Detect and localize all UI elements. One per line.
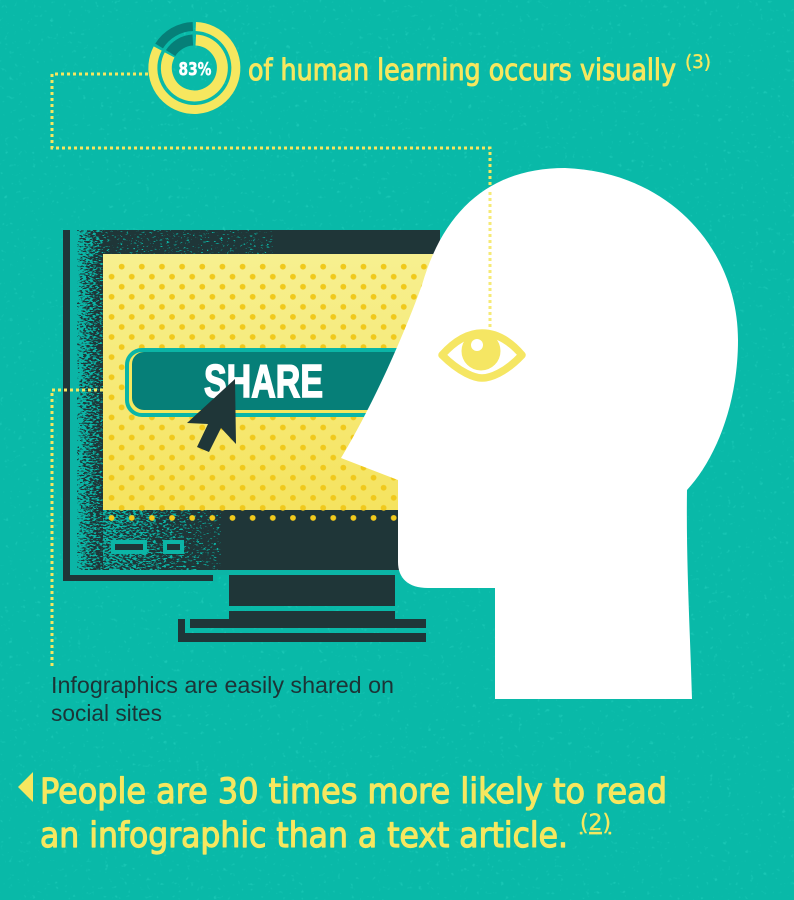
callout: 30 times more likely: [40, 772, 667, 856]
callout: 30 times more likely: an infographic than a text article.: [40, 816, 568, 856]
icon: left arrow: [18, 772, 33, 802]
reference 2: (2): [580, 811, 611, 836]
monitor buttons: [113, 542, 182, 552]
heading: visual learning: of human learning occurs visually: [248, 53, 676, 87]
icon: eye: [442, 332, 522, 378]
connector: screen to caption: [52, 390, 103, 668]
share button: [127, 350, 422, 415]
donut value: 83%: [178, 59, 212, 80]
frame grain: [75, 230, 273, 570]
share label: SHARE: [204, 355, 323, 407]
caption: sharing: social sites: [51, 700, 162, 726]
caption: sharing: Infographics are easily shared on: [51, 672, 394, 698]
connector: donut to eye: [52, 74, 490, 330]
monitor stand: [178, 575, 426, 642]
head silhouette: [341, 168, 738, 699]
donut chart: 83%: [153, 26, 236, 109]
icon: cursor arrow: [187, 379, 236, 452]
monitor: [63, 230, 442, 642]
halftone dots: [108, 262, 432, 522]
screen: [103, 254, 433, 510]
monitor frame: [63, 230, 440, 581]
reference 3: (3): [685, 51, 711, 73]
callout: 30 times more likely: People are 30 times more likely to read: [40, 772, 667, 812]
connector over head: [488, 192, 492, 330]
caption: sharing: [51, 672, 394, 726]
